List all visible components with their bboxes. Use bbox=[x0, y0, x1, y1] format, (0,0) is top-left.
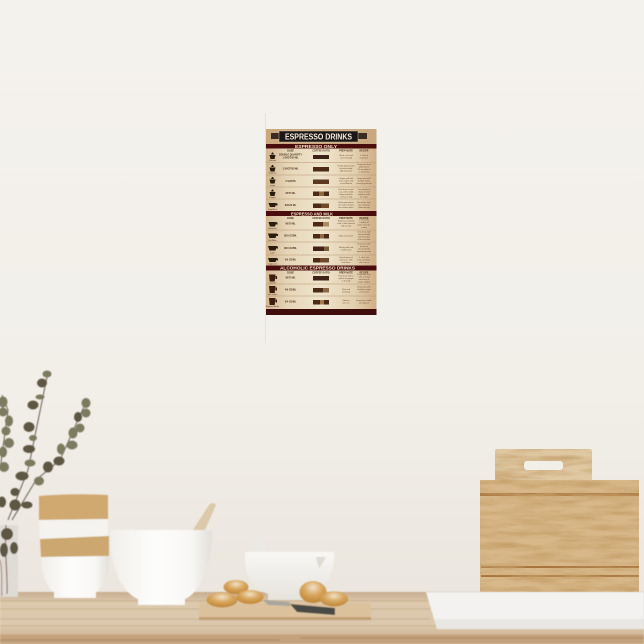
row: espresso martini: Espresso, vodka bbox=[356, 299, 373, 302]
row: doppio: Two shots in one bbox=[338, 188, 355, 191]
wooden chopping boards bbox=[480, 449, 639, 592]
column headings: PREP NOTE bbox=[339, 271, 353, 274]
row: doppio: together with bbox=[358, 193, 371, 196]
row: lungo: double water bbox=[358, 180, 370, 182]
row: espresso: Finely ground and bbox=[338, 164, 355, 168]
section: espresso and milk: ESPRESSO AND MILK bbox=[291, 211, 334, 216]
footer band bbox=[266, 309, 376, 315]
column headings: DOSE bbox=[287, 217, 294, 220]
row: corretto: Espresso shot bbox=[357, 273, 371, 276]
column headings: PREP NOTE bbox=[339, 149, 353, 152]
row: cappuccino bbox=[268, 256, 371, 266]
row: lungo: more water and bbox=[339, 180, 354, 182]
row: cappuccino: Equal parts of bbox=[340, 256, 353, 259]
row: lungo: Lungo bbox=[270, 185, 275, 187]
column headings: PREP NOTE bbox=[339, 217, 353, 220]
row: irish coffee: warming bbox=[342, 290, 351, 294]
row: latte: 8/10 OZ/ML bbox=[284, 247, 297, 250]
row: ristretto: espresso bbox=[360, 156, 369, 160]
row: long black: the crema intact bbox=[339, 206, 354, 209]
vase bbox=[0, 525, 18, 597]
row: espresso: 1 SHOT/30 ML bbox=[282, 168, 299, 170]
row: espresso: 25 seconds in bbox=[358, 169, 371, 171]
row: lungo: through grounds bbox=[356, 182, 372, 185]
poster hanging edge line bbox=[264, 113, 266, 343]
row: latte: Latte bbox=[270, 252, 274, 254]
row: latte: steamed milk bbox=[358, 248, 371, 250]
column headings bbox=[287, 271, 369, 274]
row: cappuccino: milk and foam bbox=[358, 260, 371, 262]
row: doppio: no water bbox=[360, 196, 368, 198]
row: doppio: Doppio bbox=[270, 197, 275, 199]
row: flat white: and thin layer bbox=[358, 236, 371, 238]
row: long black: Long Black bbox=[268, 209, 277, 211]
row: latte: plenty of bbox=[360, 245, 368, 248]
row: ristretto bbox=[269, 152, 369, 162]
row: espresso martini: 3/4 OZ/ML bbox=[285, 300, 297, 304]
row: long black bbox=[268, 201, 372, 211]
row: flat white: steamed milk bbox=[358, 233, 371, 236]
row: cappuccino: espresso, milk bbox=[339, 258, 354, 262]
mortar and pestle bbox=[245, 537, 334, 600]
row: long black: hot water, keeps bbox=[338, 204, 354, 206]
table top bbox=[0, 592, 644, 644]
row: macchiato: 1 shot with bbox=[359, 218, 370, 222]
section: espresso only: ESPRESSO ONLY bbox=[295, 144, 337, 149]
row: ristretto: DOUBLE QUANTITY bbox=[279, 154, 302, 156]
row: macchiato: Espresso marked bbox=[338, 220, 355, 222]
row: cappuccino: and foam bbox=[342, 262, 351, 264]
row: macchiato: a dollop of bbox=[359, 222, 369, 224]
row: ristretto: Short, rich and bbox=[339, 154, 354, 157]
poster: espresso drinks chart bbox=[266, 129, 376, 315]
row: espresso: Espresso shot bbox=[357, 163, 371, 166]
column headings: COFFEE RATIO bbox=[312, 271, 330, 274]
leaves bbox=[0, 370, 90, 557]
row: long black: two espresso bbox=[358, 204, 371, 206]
section: espresso only bbox=[266, 144, 376, 211]
row: doppio: body and thick bbox=[339, 193, 354, 196]
row: ristretto: concentrated bbox=[340, 156, 353, 160]
row: corretto: Espresso with a bbox=[339, 274, 354, 278]
row: corretto: splash of grappa bbox=[338, 277, 355, 280]
row: macchiato: crema bbox=[361, 226, 368, 229]
section: alcoholic espresso drinks bbox=[266, 266, 376, 308]
row: latte bbox=[268, 242, 371, 254]
row: espresso martini: and liqueur bbox=[359, 302, 369, 304]
row: espresso: brewed under bbox=[340, 167, 353, 170]
row: macchiato bbox=[268, 218, 371, 230]
row: long black: Hot water then bbox=[357, 201, 372, 204]
row: lungo: 2 SHOTS bbox=[285, 180, 296, 183]
row: macchiato: 60/70 ML bbox=[285, 222, 296, 226]
column headings: RECIPE bbox=[360, 271, 369, 274]
row: irish coffee: 4/6 OZ/ML bbox=[285, 288, 297, 292]
row: long black: shots on top bbox=[358, 206, 371, 209]
row: corretto bbox=[269, 273, 371, 284]
row: espresso martini: Shaken bbox=[342, 300, 350, 302]
row: espresso martini: Espresso Martini bbox=[266, 305, 280, 308]
row: cappuccino: with cocoa bbox=[359, 261, 370, 264]
row: irish coffee: Irish Coffee bbox=[268, 294, 277, 296]
row: latte: topped by foam bbox=[357, 250, 371, 253]
row: corretto: 60/70 ML bbox=[285, 276, 296, 280]
row: doppio bbox=[270, 188, 371, 199]
row: irish coffee: whiskey, sugar bbox=[357, 288, 371, 291]
column headings: DOSE bbox=[287, 271, 294, 274]
row: long black: Shots poured on bbox=[338, 201, 354, 204]
row: latte: a little foam bbox=[341, 248, 352, 252]
section: espresso and milk bbox=[266, 211, 376, 266]
row: long black: 90/120 ML bbox=[285, 204, 297, 207]
row: irish coffee: Espresso with bbox=[358, 286, 371, 288]
row: doppio: crema on top bbox=[340, 196, 353, 198]
row: espresso: pulled over bbox=[359, 166, 369, 168]
column headings: RECIPE bbox=[360, 217, 369, 220]
column headings: DOSE bbox=[287, 149, 294, 152]
plant: eucalyptus in glass vase bbox=[0, 370, 90, 597]
column headings bbox=[287, 217, 369, 220]
row: irish coffee bbox=[268, 286, 371, 296]
bread board with rolls and knife bbox=[199, 580, 371, 620]
title banner: ESPRESSO DRINKS bbox=[285, 133, 353, 142]
white slab on table bbox=[426, 592, 644, 629]
row: flat white: Flat White bbox=[268, 239, 277, 242]
row: lungo bbox=[270, 177, 372, 187]
row: flat white: Silky, less foam bbox=[339, 236, 353, 238]
striped cup bbox=[39, 494, 109, 598]
row: corretto: or brandy bbox=[342, 280, 351, 282]
row: doppio: cup, with a bold bbox=[339, 190, 354, 194]
row: espresso: a small cup bbox=[359, 172, 370, 174]
row: espresso: high pressure bbox=[340, 170, 353, 172]
row: flat white: of micro foam bbox=[358, 238, 371, 241]
row: macchiato: with a little foamed bbox=[337, 222, 355, 225]
row: latte: Espresso with bbox=[358, 242, 371, 246]
title banner bbox=[266, 129, 376, 144]
section: alcoholic espresso drinks: ALCOHOLIC ESPRESSO DRINKS bbox=[280, 266, 355, 271]
column headings: COFFEE RATIO bbox=[312, 217, 330, 220]
row: macchiato: Macchiato bbox=[268, 227, 277, 230]
row: doppio: Two espresso bbox=[358, 188, 371, 191]
row: flat white: Two shots with bbox=[357, 230, 372, 234]
row: corretto: with a small bbox=[359, 276, 370, 278]
row: espresso martini: over ice bbox=[342, 302, 350, 304]
row: corretto: Corretto bbox=[269, 282, 276, 284]
row: lungo: a mild flavour bbox=[340, 182, 352, 185]
row: flat white: 8/10 OZ/ML bbox=[284, 234, 297, 238]
row: corretto: liquor added bbox=[358, 280, 371, 284]
row: macchiato: foam over the bbox=[358, 224, 371, 226]
white mixing bowl with spoon bbox=[110, 503, 216, 605]
row: doppio: shots served bbox=[358, 190, 371, 194]
row: cappuccino: Cappuccino bbox=[268, 264, 277, 266]
row: lungo: Espresso with bbox=[358, 177, 371, 180]
row: corretto: measure of bbox=[359, 278, 370, 281]
row: lungo: Longer pull with bbox=[339, 177, 354, 180]
row: latte: Mostly milk and bbox=[339, 246, 354, 249]
rolls bbox=[206, 580, 348, 608]
row: flat white bbox=[268, 230, 372, 242]
row: ristretto: 1 shot of bbox=[360, 154, 368, 157]
row: espresso martini bbox=[266, 298, 373, 308]
row: cappuccino: 1 shot, hot bbox=[359, 256, 369, 259]
row: espresso bbox=[269, 163, 371, 174]
row: ristretto: 1 SHOT/30 ML bbox=[282, 156, 299, 160]
row: cappuccino: 5/6 OZ/ML bbox=[285, 258, 297, 262]
row: espresso: Espresso bbox=[269, 172, 276, 174]
row: ristretto: Ristretto bbox=[269, 159, 276, 162]
row: irish coffee: Rich and bbox=[342, 289, 351, 291]
column headings: COFFEE RATIO bbox=[312, 149, 330, 152]
row: macchiato: milk on top bbox=[341, 224, 352, 228]
row: doppio: 60/70 ML bbox=[285, 192, 296, 195]
column headings: RECIPE bbox=[360, 149, 369, 152]
column headings bbox=[287, 149, 369, 152]
row: irish coffee: and cream bbox=[359, 290, 369, 294]
